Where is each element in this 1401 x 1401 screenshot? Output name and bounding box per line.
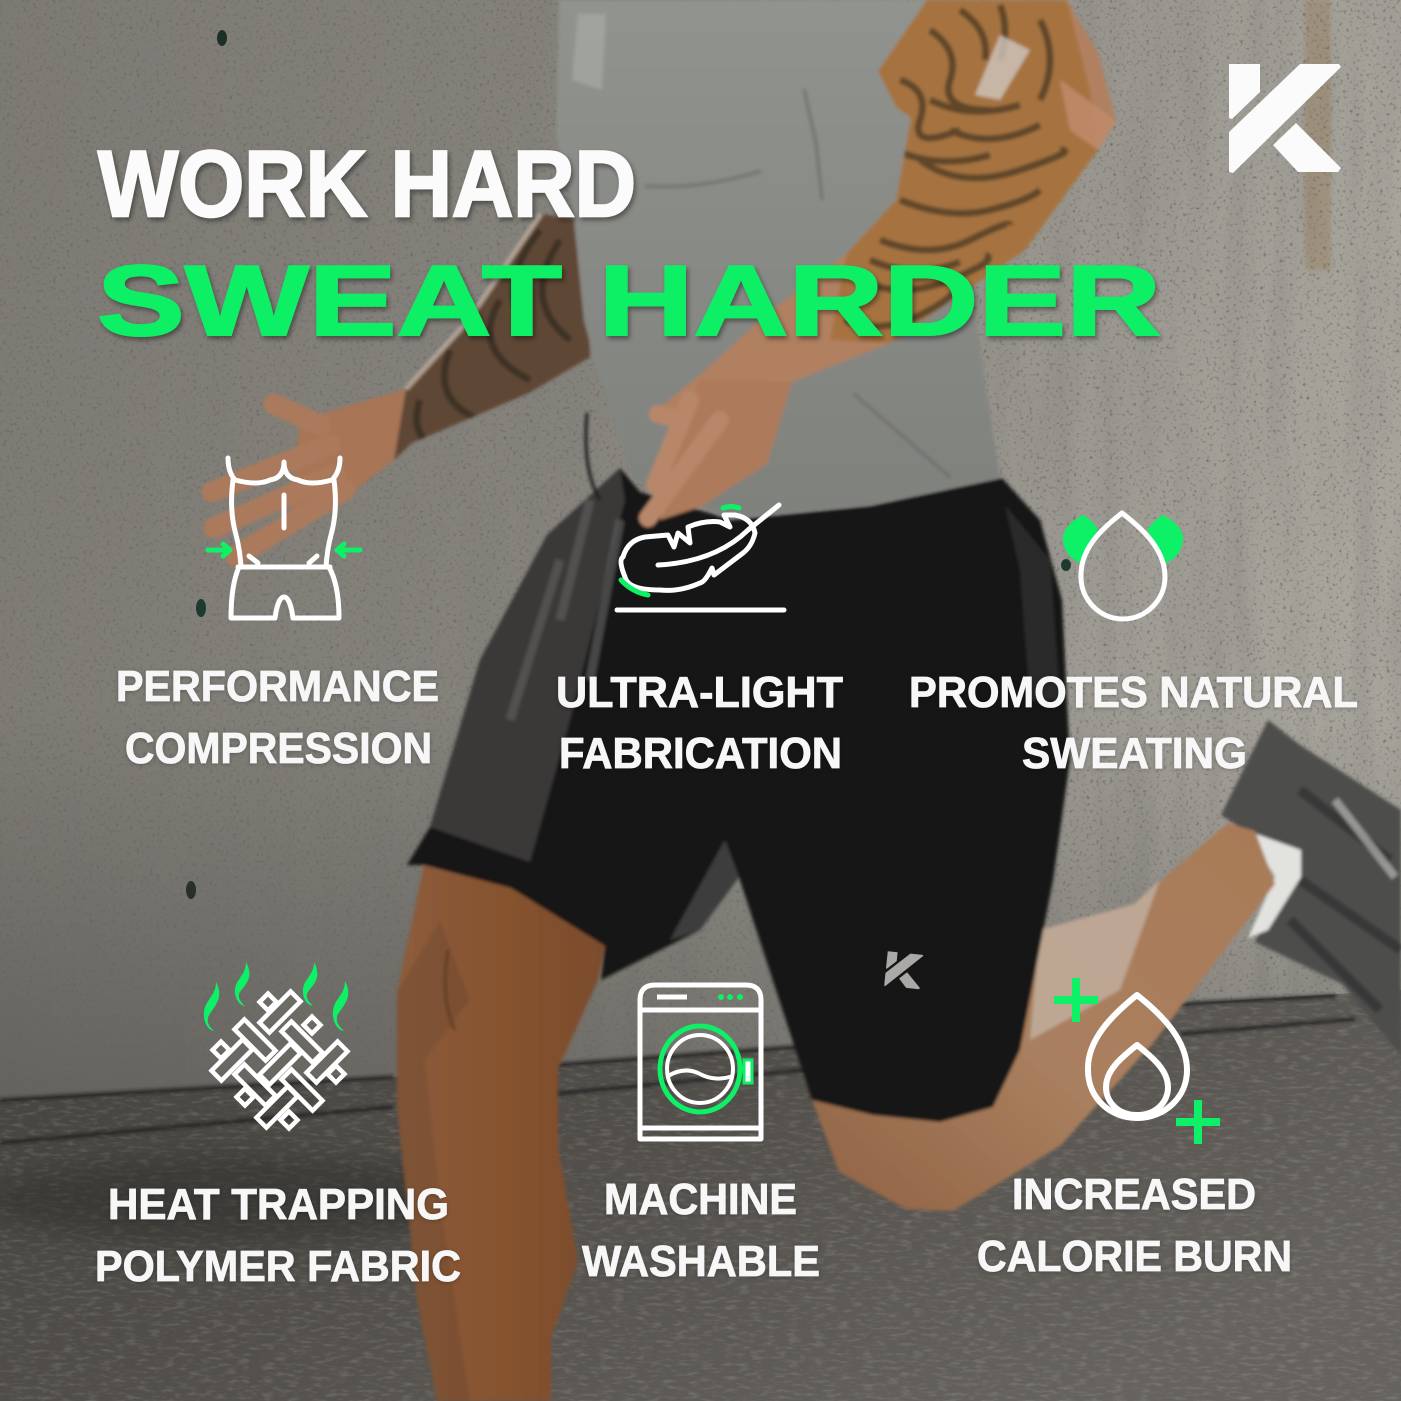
heading line: sweat harder: SWEAT HARDER: [97, 245, 1161, 357]
feature: heat trapping polymer fabric: [95, 962, 461, 1291]
icon: torso with compression arrows: [208, 458, 360, 618]
drawstring: [586, 413, 600, 500]
icon: flame with plus signs: [1054, 978, 1220, 1144]
label: [116, 662, 439, 773]
left forearm and hand: [290, 214, 590, 510]
logo: [1229, 64, 1341, 173]
label: PERFORMANCE: [116, 662, 439, 711]
label: SWEATING: [1022, 729, 1247, 778]
runner: rear shoe and sock: [1221, 720, 1401, 1055]
label: PROMOTES NATURAL: [909, 668, 1358, 717]
label: INCREASED: [1012, 1170, 1256, 1219]
label: HEAT TRAPPING: [108, 1180, 449, 1229]
label: COMPRESSION: [125, 724, 432, 773]
label: ULTRA-LIGHT: [556, 668, 843, 717]
heading line: work hard: WORK HARD: [98, 131, 636, 236]
icon: washing machine: [640, 985, 761, 1139]
shirt: [556, 0, 1000, 518]
label: WASHABLE: [582, 1237, 820, 1286]
front leg: [397, 865, 605, 1401]
feature: performance compression: [116, 458, 439, 773]
label: FABRICATION: [559, 729, 842, 778]
feature: ultra-light fabrication: [556, 505, 843, 778]
label: [95, 1180, 461, 1291]
feature: promotes natural sweating: [909, 513, 1358, 778]
feature: machine washable: [582, 985, 820, 1286]
label: [909, 668, 1358, 778]
rear leg: [812, 823, 1275, 1211]
icon: woven fabric with heat waves: [204, 962, 348, 1128]
feature: increased calorie burn: [977, 978, 1292, 1281]
tattooed right arm: [657, 0, 1116, 464]
label: [556, 668, 843, 778]
label: POLYMER FABRIC: [95, 1242, 461, 1291]
shorts: [407, 468, 1070, 1122]
ground: [0, 980, 1401, 1401]
title: [97, 131, 1161, 357]
icon: water drop: [1063, 513, 1183, 619]
label: [582, 1175, 820, 1286]
label: MACHINE: [604, 1175, 797, 1224]
label: [977, 1170, 1292, 1281]
icon: feather: [617, 505, 784, 610]
label: CALORIE BURN: [977, 1232, 1292, 1281]
